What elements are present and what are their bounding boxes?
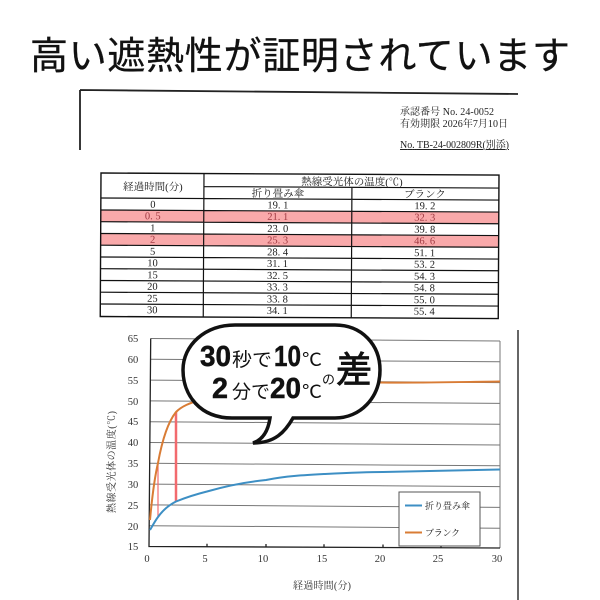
y axis numbers: 25: [128, 501, 138, 512]
table header: ブランク: [404, 189, 446, 201]
table values: 23. 0: [267, 224, 288, 235]
y axis numbers: 50: [128, 397, 138, 408]
folding umbrella curve: [150, 470, 500, 530]
callout text: ℃: [302, 350, 322, 370]
x axis numbers: 30: [492, 554, 502, 565]
table values: 32. 5: [267, 271, 288, 282]
table values: 34. 1: [267, 306, 288, 317]
table values: 5: [150, 247, 155, 258]
x axis title: 経過時間(分): [293, 579, 351, 592]
table values: 55. 4: [414, 307, 436, 318]
table header: 経過時間(分): [123, 180, 183, 193]
table values: 33. 8: [267, 294, 288, 305]
y axis numbers: 40: [128, 438, 138, 449]
callout text: 分で: [232, 381, 270, 403]
x axis numbers: [144, 554, 502, 565]
y axis numbers: 35: [128, 459, 138, 470]
callout text: 20: [270, 373, 301, 405]
table values: 54. 8: [414, 283, 435, 294]
table header: [123, 174, 446, 201]
table values: 25. 3: [267, 235, 288, 246]
difference markers: [158, 412, 176, 517]
legend: [399, 492, 480, 546]
temperature table: [100, 173, 499, 319]
x axis numbers: 20: [375, 554, 385, 565]
table values: 0. 5: [145, 211, 161, 222]
table values: 10: [147, 258, 158, 269]
y axis numbers: 15: [128, 542, 138, 553]
table values: 19. 1: [267, 200, 288, 211]
table grid: [100, 173, 499, 319]
y axis numbers: 65: [128, 334, 138, 345]
table values: 25: [147, 294, 158, 305]
callout text: [200, 341, 372, 405]
table values: 46. 6: [414, 236, 435, 247]
table values: [144, 200, 436, 318]
y axis numbers: 60: [128, 355, 138, 366]
blank curve: [150, 382, 500, 520]
callout text: 30: [200, 341, 231, 373]
table values: 15: [147, 270, 158, 281]
y axis numbers: [128, 334, 138, 553]
table values: 28. 4: [267, 247, 289, 258]
y axis numbers: 45: [128, 417, 138, 428]
table values: 21. 1: [267, 212, 288, 223]
x axis numbers: 10: [258, 554, 268, 565]
table values: 39. 8: [414, 225, 435, 236]
table values: 20: [147, 282, 158, 293]
table values: 54. 3: [414, 272, 435, 283]
table values: 31. 1: [267, 259, 288, 270]
table values: 33. 3: [267, 282, 288, 293]
table values: 53. 2: [414, 260, 435, 271]
legend: ブランク: [425, 528, 460, 538]
callout: temperature difference speech bubble: [183, 325, 380, 443]
x axis numbers: 25: [433, 554, 443, 565]
table values: 32. 3: [414, 213, 435, 224]
approval number text block: [400, 105, 509, 151]
title: 高い遮熱性が証明されています: [30, 36, 570, 78]
table values: 2: [150, 235, 155, 246]
approval number text block: 承認番号 No. 24-0052: [400, 105, 494, 118]
callout text: ℃: [302, 382, 322, 402]
table values: 19. 2: [414, 201, 435, 212]
callout text: 2: [212, 373, 228, 405]
approval number text block: No. TB-24-002809R(別添): [400, 138, 509, 151]
y axis numbers: 55: [128, 376, 138, 387]
callout text: の: [322, 372, 335, 387]
y axis title: 熱線受光体の温度(℃): [105, 411, 118, 513]
table values: 51. 1: [414, 248, 435, 259]
table values: 0: [150, 200, 155, 211]
y axis numbers: 30: [128, 480, 138, 491]
table header: 熱線受光体の温度(℃): [301, 175, 403, 189]
table values: 30: [147, 305, 158, 316]
x axis numbers: 0: [144, 554, 150, 565]
y axis numbers: 20: [128, 522, 138, 533]
table values: 55. 0: [414, 295, 435, 306]
line chart: [105, 334, 502, 592]
callout text: 差: [336, 349, 372, 390]
panel: test report sheet: [80, 90, 518, 600]
legend: 折り畳み傘: [425, 500, 470, 511]
table values: 1: [150, 223, 155, 234]
table header: 折り畳み傘: [252, 187, 305, 200]
x axis numbers: 5: [202, 554, 208, 565]
approval number text block: 有効期限 2026年7月10日: [400, 117, 508, 130]
callout text: 秒で: [232, 349, 272, 371]
callout text: 10: [274, 341, 301, 373]
highlighted rows: [101, 210, 499, 247]
x axis numbers: 15: [317, 554, 327, 565]
chart axes: [149, 338, 500, 548]
